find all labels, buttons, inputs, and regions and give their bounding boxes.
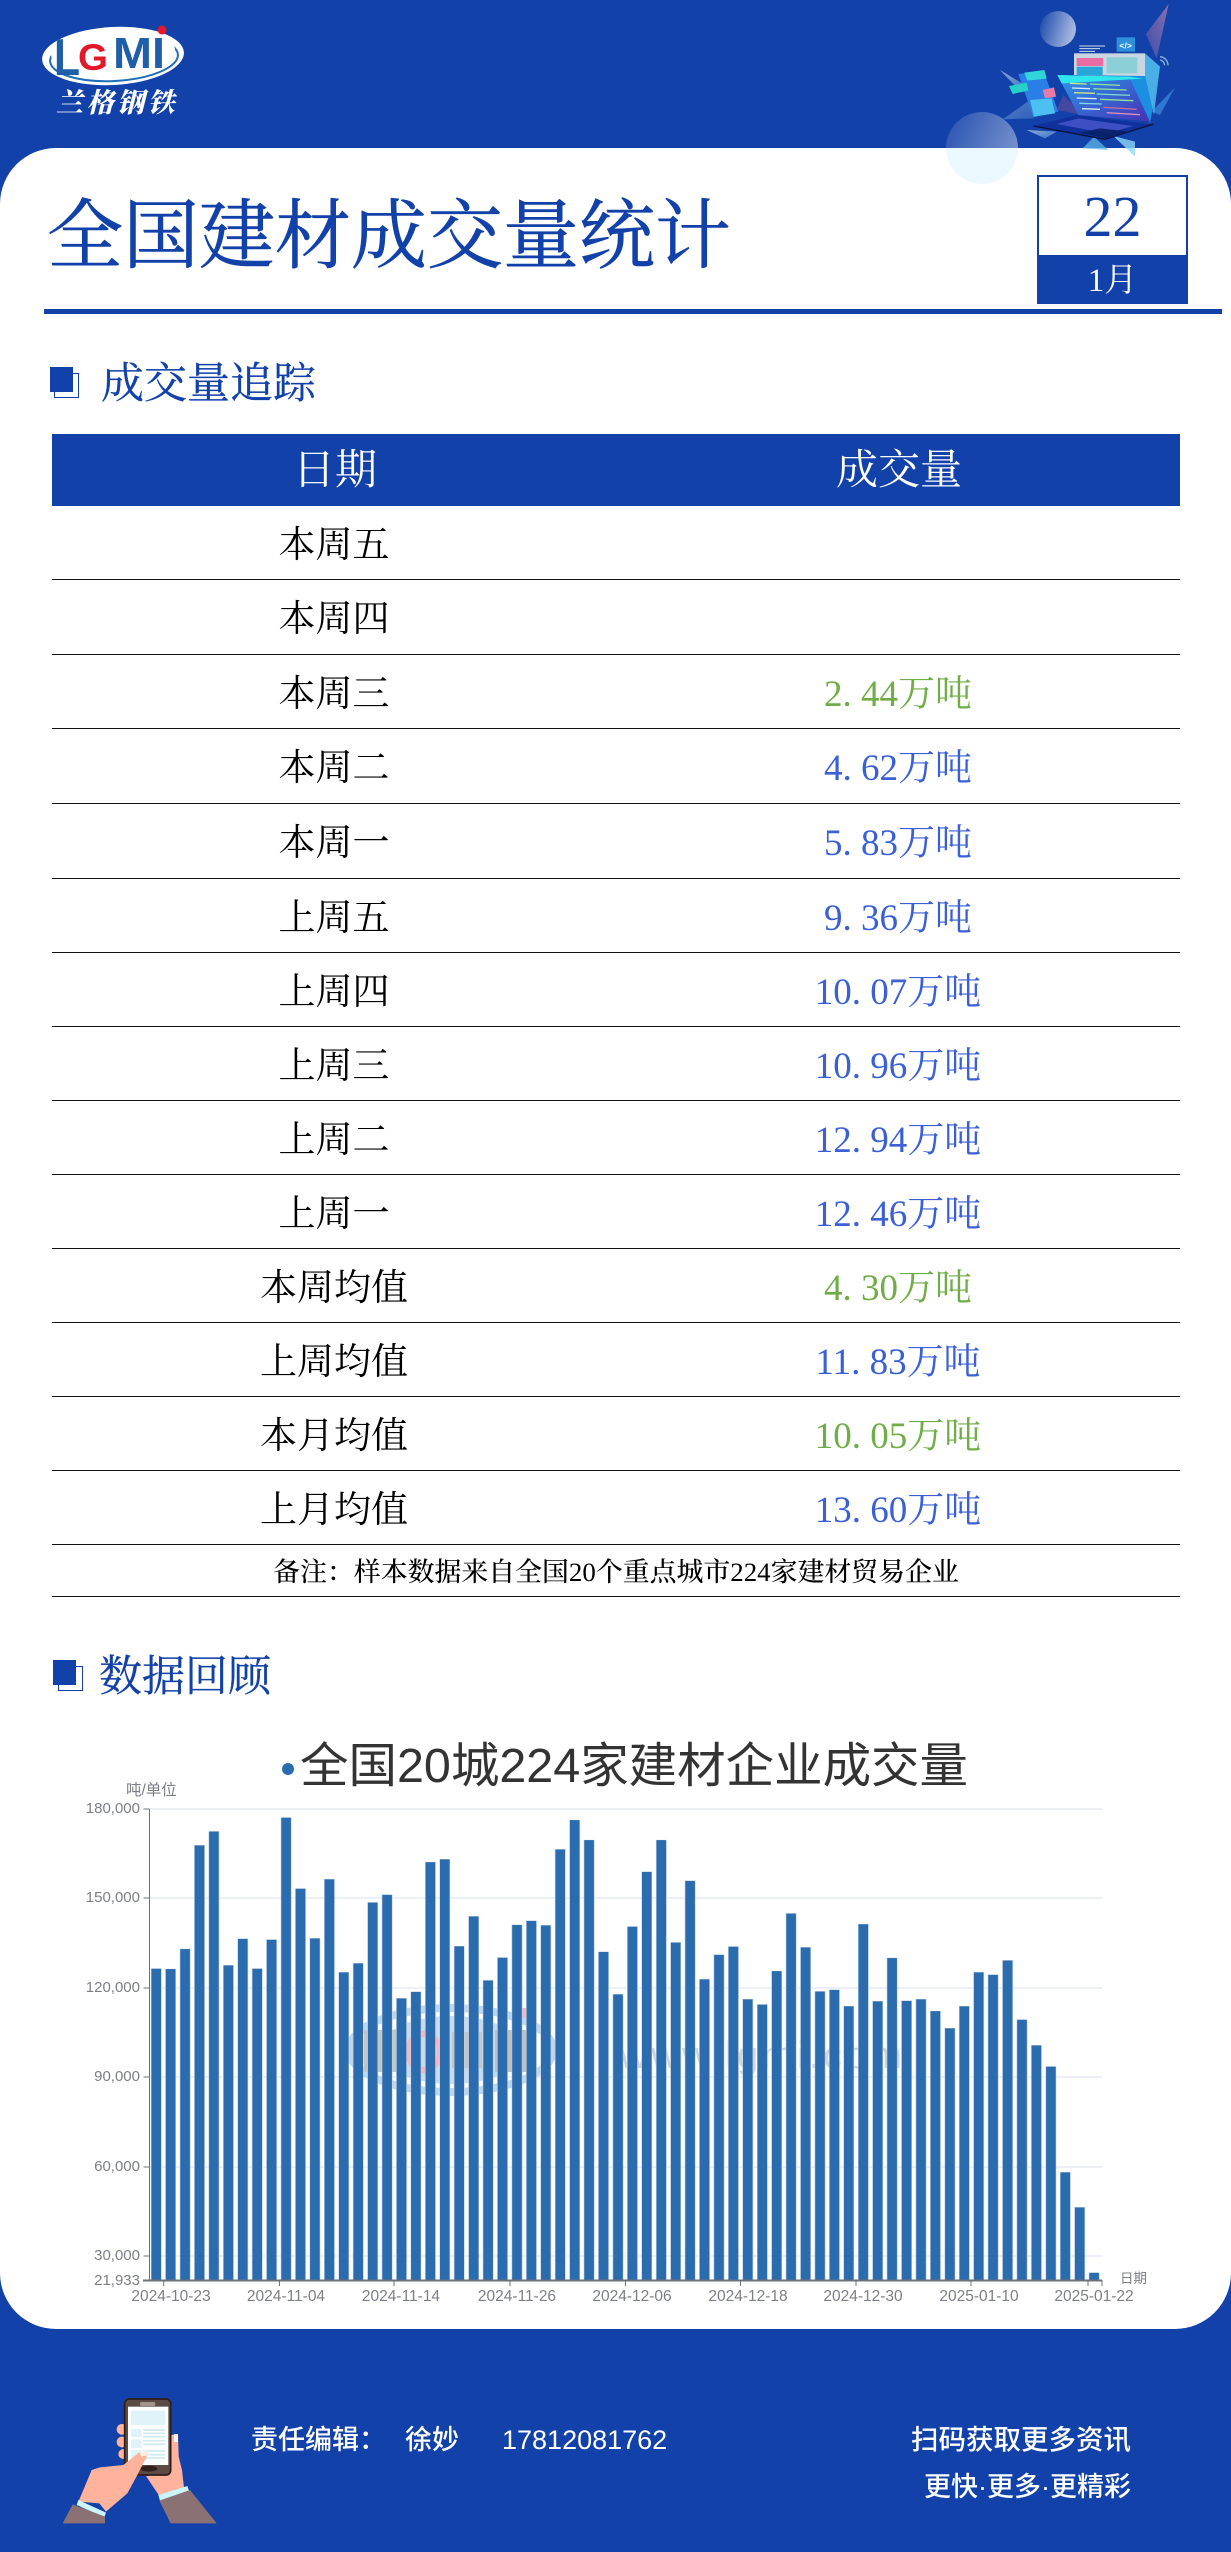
row: 本周一: 本周一: [278, 823, 390, 864]
section heading icon 1: [50, 367, 79, 398]
row: 上周四: [52, 953, 1180, 1027]
editor phone: 17812081762: [502, 2425, 667, 2455]
right cuff: [158, 2486, 189, 2501]
y axis unit: 吨/单位: [126, 1781, 177, 1799]
row: 上月均值: [52, 1471, 1180, 1545]
watermark logo: [349, 2008, 553, 2092]
day number: 22: [1084, 184, 1142, 249]
row: 本周均值: .: [842, 1268, 852, 1309]
table: trading volume: [52, 434, 1180, 1597]
row: 上周二: .: [852, 1120, 861, 1161]
row: 本周四: [52, 580, 1180, 655]
row: 本月均值: .: [852, 1416, 861, 1457]
title rule: [44, 309, 1222, 314]
logo ellipse: [41, 23, 185, 89]
editor label: 责任编辑：: [251, 2425, 386, 2455]
row: 上周均值: 上周均值: [260, 1342, 408, 1383]
axes: [143, 1809, 1102, 2286]
row: 上周五: 9 36万吨: [824, 898, 972, 939]
row: 本周五: [52, 506, 1180, 580]
row: 上周一: 12 46万吨: [815, 1194, 981, 1235]
x axis labels: 2025-01-10: [939, 2288, 1019, 2305]
table header: 成交量: [836, 448, 962, 494]
x axis labels: [131, 2288, 1134, 2305]
row: 上周四: 上周四: [278, 972, 390, 1013]
row: 上周四: 10 07万吨: [815, 972, 981, 1013]
section heading: 数据回顾: 数据回顾: [99, 1654, 271, 1701]
row: 上周五: .: [842, 898, 852, 939]
y axis labels: 60,000: [94, 2158, 140, 2175]
right hand: [146, 2434, 184, 2496]
row: 本周三: .: [842, 674, 852, 715]
row: 本月均值: 本月均值: [260, 1416, 408, 1457]
row: 上周五: 上周五: [278, 898, 390, 939]
title: 全国建材成交量统计: [47, 195, 731, 279]
row: 上周五: [52, 879, 1180, 953]
left hand with pointing finger: [78, 2452, 147, 2512]
row: 上周均值: [52, 1323, 1180, 1397]
back fingers: [117, 2424, 128, 2459]
row: 本月均值: 10 05万吨: [815, 1416, 981, 1457]
x axis labels: 2025-01-22: [1054, 2288, 1134, 2305]
table note: [52, 1544, 1180, 1597]
row: 上月均值: .: [852, 1490, 861, 1531]
row: 上周二: [52, 1101, 1180, 1175]
row: 上周三: 10 96万吨: [815, 1046, 981, 1087]
row: 上周一: .: [852, 1194, 861, 1235]
y axis labels: 30,000: [94, 2247, 140, 2264]
row: 本周五: 本周五: [278, 525, 390, 566]
row: 本周三: [52, 655, 1180, 729]
logo letters: [54, 29, 165, 87]
thumb nail: [174, 2434, 178, 2442]
day number: [1037, 175, 1188, 257]
table note: 备注：样本数据来自全国20个重点城市224家建材贸易企业: [273, 1557, 959, 1587]
finger nail: [139, 2450, 147, 2457]
grid lines: [150, 1809, 1102, 2256]
phone body: [125, 2399, 171, 2475]
bars: [151, 1818, 1099, 2280]
footer: QR prompt: 扫码获取更多资讯: [911, 2424, 1131, 2455]
row: 本周一: 5 83万吨: [824, 823, 972, 864]
y axis labels: 21,933: [94, 2272, 140, 2289]
row: 上周三: 上周三: [278, 1046, 390, 1087]
date box: [1037, 175, 1188, 304]
row: 本周均值: 4 30万吨: [824, 1268, 972, 1309]
row: 上月均值: 13 60万吨: [815, 1490, 981, 1531]
row: 上月均值: 上月均值: [260, 1490, 408, 1531]
footer: slogan: 更快·更多·更精彩: [924, 2472, 1131, 2502]
row: 上周二: 上周二: [278, 1120, 390, 1161]
icon: hands holding phone: [62, 2398, 216, 2524]
table header: [52, 434, 1180, 506]
x axis labels: 2024-11-26: [478, 2288, 556, 2305]
logo letters: G: [78, 37, 108, 78]
section heading: 成交量追踪: 成交量追踪: [101, 361, 316, 408]
row: 本周三: 本周三: [278, 674, 390, 715]
editor name: 徐妙: [405, 2425, 459, 2455]
table header: 日期: [293, 448, 377, 494]
row: 本周二: [52, 729, 1180, 804]
row: 上周二: 12 94万吨: [815, 1120, 981, 1161]
x axis labels: 2024-10-23: [131, 2288, 211, 2305]
laptop graphic: [1000, 4, 1175, 157]
row: 本周均值: [52, 1249, 1180, 1323]
row: 本周二: .: [842, 748, 852, 789]
row: 上周均值: .: [851, 1342, 860, 1383]
y axis labels: 150,000: [86, 1889, 140, 1906]
logo chinese name: 兰格钢铁: [56, 88, 178, 118]
row: 上周三: [52, 1027, 1180, 1101]
row: 本周一: .: [842, 823, 852, 864]
x axis labels: 2024-11-14: [362, 2288, 440, 2305]
logo letters: L: [54, 29, 80, 87]
right sleeve: [159, 2490, 217, 2523]
footer: editor contact: [251, 2425, 667, 2455]
decorative circles: [946, 11, 1076, 184]
row: 本周二: 4 62万吨: [824, 748, 972, 789]
y axis labels: 180,000: [86, 1800, 140, 1817]
row: 本周二: 本周二: [278, 748, 390, 789]
x axis labels: 2024-11-04: [247, 2288, 325, 2305]
row: 上周三: .: [852, 1046, 861, 1087]
row: 本周一: [52, 804, 1180, 879]
row: 本周均值: 本周均值: [260, 1268, 408, 1309]
x axis labels: 2024-12-30: [823, 2288, 903, 2305]
section heading icon 2: [53, 1660, 83, 1691]
left sleeve: [63, 2504, 105, 2523]
row: 本周四: 本周四: [278, 599, 390, 640]
row: 本周三: 2 44万吨: [824, 674, 972, 715]
logo: LGMI 兰格钢铁: [42, 26, 184, 118]
chart title: 全国20城224家建材企业成交量: [300, 1740, 968, 1793]
laptop graphic: </>: [1119, 41, 1132, 51]
row: 本月均值: [52, 1397, 1180, 1471]
illustration: laptop and phone: [946, 4, 1175, 184]
row: 上周一: 上周一: [278, 1194, 390, 1235]
logo letters: MI: [113, 29, 165, 78]
row: 上周一: [52, 1175, 1180, 1249]
row: 上周均值: 11 83万吨: [815, 1342, 981, 1383]
month: [1037, 256, 1188, 304]
y axis labels: [86, 1800, 140, 2289]
x axis unit: 日期: [1120, 2271, 1147, 2286]
left cuff: [77, 2500, 106, 2517]
x axis labels: 2024-12-18: [708, 2288, 788, 2305]
watermark url: www.lgmi.com: [619, 2035, 902, 2077]
x axis labels: 2024-12-06: [592, 2288, 672, 2305]
month: 1月: [1088, 263, 1137, 299]
y axis labels: 90,000: [94, 2068, 140, 2085]
row: 上周四: .: [852, 972, 861, 1013]
y axis labels: 120,000: [86, 1979, 140, 1996]
